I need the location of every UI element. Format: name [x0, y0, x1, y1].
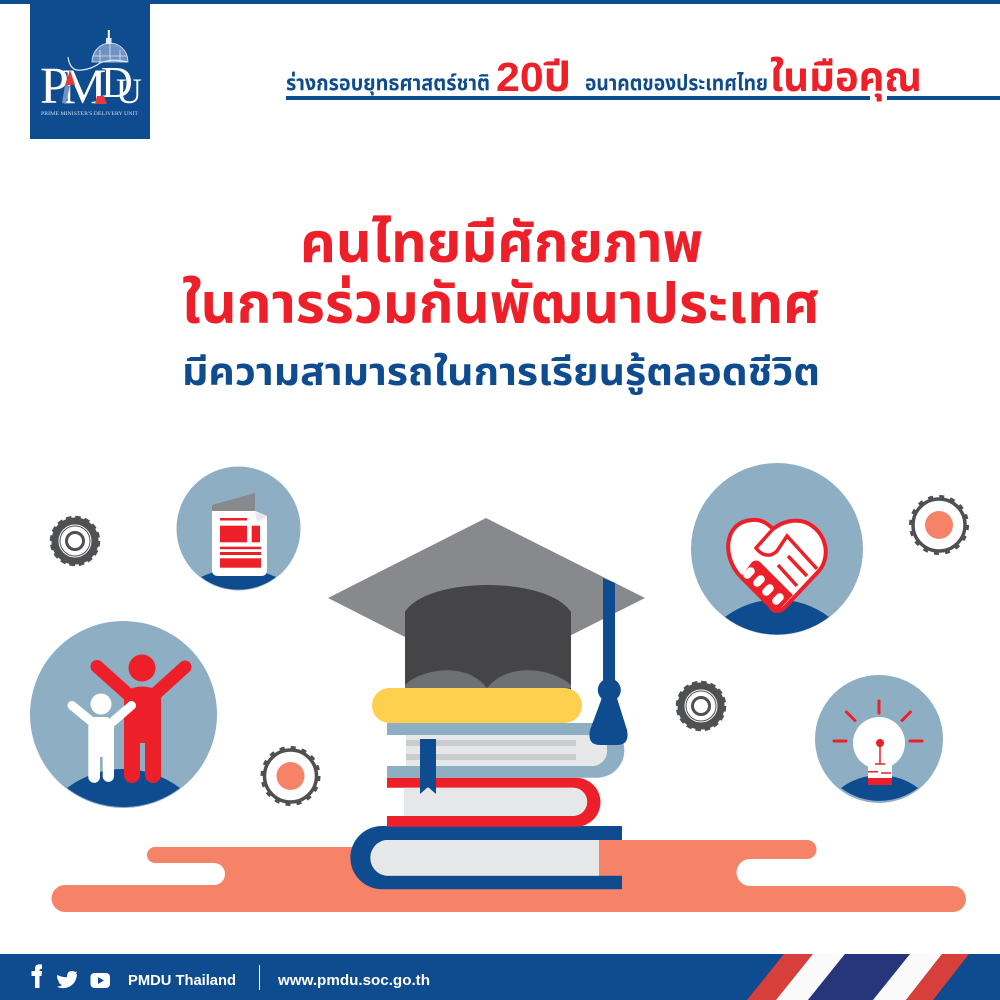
- yellow cap band: [372, 688, 582, 723]
- main heading: [182, 211, 820, 395]
- icon: twitter: [57, 971, 77, 988]
- book stack: [350, 723, 624, 889]
- middle red book: [387, 778, 600, 827]
- gear: peach lower left: [262, 748, 319, 804]
- logo wave: [68, 57, 127, 70]
- footer name: PMDU Thailand: [128, 973, 236, 989]
- icon: handshake heart circle: [691, 463, 863, 635]
- logo lettering: U: [116, 71, 142, 111]
- logo lettering: M: [62, 58, 106, 114]
- graduation cap: [328, 518, 645, 745]
- header slogan: 20ปี: [496, 54, 571, 100]
- tassel: [589, 578, 628, 745]
- header slogan: ในมือคุณ: [770, 54, 922, 102]
- logo: PMDU: [30, 4, 150, 139]
- logo lettering: P: [40, 58, 69, 115]
- top blue-grey book: [387, 723, 624, 778]
- main heading: มีความสามารถในการเรียนรู้ตลอดชีวิต: [182, 352, 820, 395]
- logo dome: [92, 30, 128, 62]
- gear: centre right: [678, 682, 724, 730]
- main heading: คนไทยมีศักยภาพ: [300, 211, 703, 274]
- logo caption: PRIME MINISTER'S DELIVERY UNIT: [41, 111, 139, 117]
- icon: youtube: [90, 973, 110, 988]
- child figure: [72, 694, 132, 783]
- peach ground shape: [52, 840, 966, 912]
- logo lettering: D: [101, 58, 133, 107]
- clasped fingers: [740, 560, 793, 612]
- gear: peach upper right: [910, 496, 968, 554]
- footer url: www.pmdu.soc.go.th: [277, 973, 430, 989]
- bottom blue book: [350, 826, 622, 889]
- upper hand: [756, 529, 817, 586]
- header slogan: ร่างกรอบยุทธศาสตร์ชาติ: [286, 72, 490, 96]
- footer bar: [0, 954, 1000, 1000]
- icon: light bulb circle: [815, 675, 943, 803]
- icon: facebook: [32, 964, 42, 988]
- flag stripes: [747, 954, 969, 1000]
- header slogan: [286, 54, 1000, 102]
- header slogan: อนาคตของประเทศไทย: [585, 72, 768, 95]
- main heading: ในการร่วมกันพัฒนาประเทศ: [182, 272, 820, 335]
- adult figure: [97, 654, 185, 783]
- gear: left top: [52, 518, 98, 564]
- bookmark ribbon: [420, 739, 436, 794]
- logo accents: [62, 70, 107, 104]
- icon: document circle: [176, 466, 300, 590]
- icon: people circle: [30, 621, 217, 808]
